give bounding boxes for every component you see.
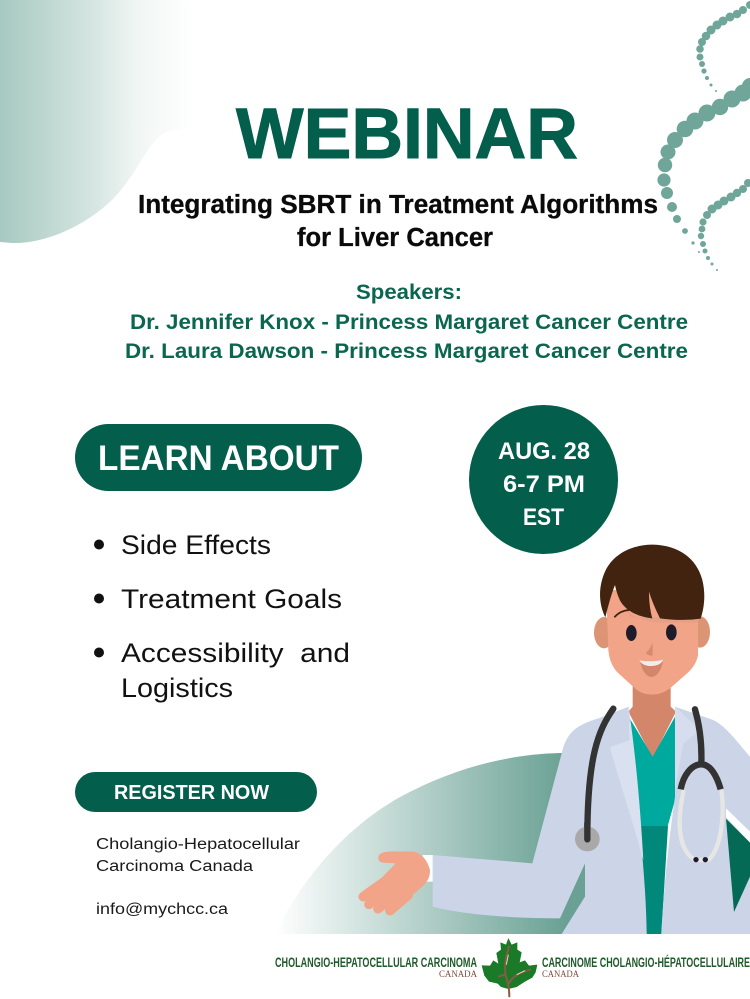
- footer english name: CHOLANGIO-HEPATOCELLULAR CARCINOMA: [275, 955, 477, 970]
- lower strand: [698, 179, 750, 271]
- speakers: [125, 281, 688, 363]
- scrub top: [629, 715, 676, 827]
- illustration: doctor: [363, 545, 750, 934]
- icon: DNA helix strands: [657, 1, 750, 271]
- right lapel: [675, 707, 700, 790]
- hand: [363, 851, 430, 911]
- clipboard: [726, 808, 750, 912]
- date badge: EST: [523, 504, 564, 531]
- bullet list: [94, 530, 350, 703]
- bullet list: Treatment Goals: [121, 584, 342, 614]
- speakers: Dr. Jennifer Knox - Princess Margaret Cancer Centre: [130, 311, 688, 334]
- main strand: [657, 78, 750, 253]
- subtitle: Integrating SBRT in Treatment Algorithms: [138, 191, 658, 219]
- register button: REGISTER NOW: [114, 782, 269, 804]
- bullet list: Accessibility and: [121, 638, 350, 668]
- shirt cuff: [423, 855, 433, 882]
- mouth: [639, 660, 663, 677]
- decorative arc behind doctor: [272, 753, 600, 940]
- forehead shadow: [627, 610, 698, 623]
- subtitle: [138, 191, 658, 252]
- bullet list: Side Effects: [121, 530, 271, 560]
- learn about pill: [75, 424, 362, 491]
- eyebrow: [614, 610, 629, 617]
- date badge: AUG. 28: [498, 438, 590, 465]
- nose: [646, 642, 653, 656]
- footer band: [273, 934, 750, 999]
- decorative blob: top left: [0, 0, 224, 243]
- icon: maple leaf logo: [482, 938, 537, 996]
- contact details: Cholangio-Hepatocellular: [96, 836, 300, 853]
- contact details: [96, 836, 300, 918]
- footer english name: [275, 955, 477, 980]
- date badge: [469, 405, 618, 554]
- register button: [75, 772, 317, 812]
- footer french name: CANADA: [542, 970, 579, 980]
- contact details: info@mychcc.ca: [96, 901, 228, 918]
- eyes: [626, 624, 677, 641]
- scrub trousers: [639, 826, 668, 934]
- left lapel: [610, 707, 643, 860]
- learn about pill: LEARN ABOUT: [98, 439, 339, 478]
- hair: [600, 545, 704, 620]
- footer english name: CANADA: [439, 970, 477, 980]
- footer french name: [542, 955, 750, 980]
- stethoscope: [575, 709, 723, 862]
- speakers: Speakers:: [356, 281, 462, 304]
- ears: [594, 616, 710, 648]
- coat: left arm and torso: [433, 707, 647, 934]
- bullet list: Logistics: [121, 673, 233, 703]
- date badge: 6-7 PM: [503, 471, 585, 498]
- coat: right side: [661, 707, 750, 934]
- face: [606, 590, 698, 695]
- neck: [628, 680, 676, 758]
- title: WEBINAR: [236, 95, 578, 174]
- contact details: Carcinoma Canada: [96, 858, 253, 875]
- speakers: Dr. Laura Dawson - Princess Margaret Cancer Centre: [125, 340, 688, 363]
- subtitle: for Liver Cancer: [297, 224, 493, 252]
- upper strand: [696, 1, 750, 92]
